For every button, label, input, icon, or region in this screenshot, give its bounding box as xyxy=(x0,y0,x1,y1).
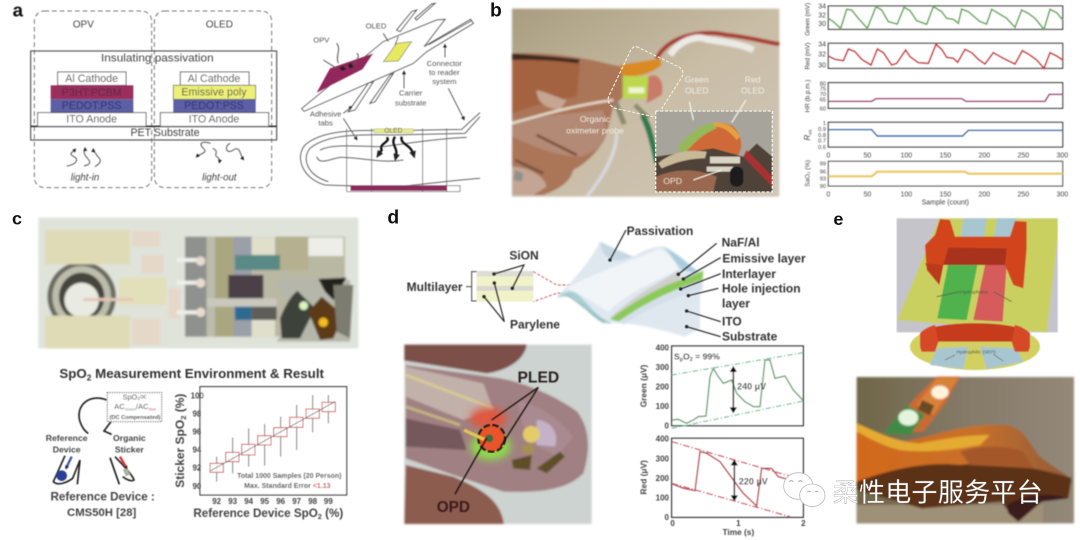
schematic: reference device vs organic sticker: Green xyxy=(125,406,136,411)
print head render xyxy=(897,218,1058,332)
icon: emission arrows xyxy=(379,137,413,157)
layer labels: Substrate xyxy=(722,330,778,344)
chart: ratio of ratios: 1 xyxy=(823,121,826,127)
print head render: Hydrophobic xyxy=(960,290,989,296)
chart: ratio of ratios: 250 xyxy=(1018,153,1029,160)
chart: green optical signal: 100 xyxy=(656,402,670,411)
chart: oxygen saturation: SaO₂ (%) xyxy=(804,160,811,187)
chart: red optical signal: Red (μV) xyxy=(638,460,648,494)
chart: sticker vs reference SpO2 xyxy=(173,387,347,521)
chart: oxygen saturation: 50 xyxy=(863,192,871,199)
chart: sticker vs reference SpO2: 2 xyxy=(318,512,322,521)
chart: ratio of ratios: 100 xyxy=(901,153,912,160)
trend line xyxy=(211,402,335,471)
panel c: sticker device and SpO2 result xyxy=(12,208,358,521)
chart: heart rate: HR (b.p.m.) xyxy=(804,80,811,112)
chart: ratio of ratios: 0 xyxy=(826,153,830,160)
chart: red signal: 34 xyxy=(818,42,826,49)
inset photo of probe on finger xyxy=(656,111,772,192)
chart: oxygen saturation: 200 xyxy=(979,192,990,199)
chart: sticker vs reference SpO2: 90 xyxy=(192,482,202,491)
layer labels: Parylene xyxy=(510,317,560,331)
chart: red optical signal: 100 xyxy=(656,493,670,502)
chart: green signal: 34 xyxy=(818,4,826,11)
photo of organic sticker xyxy=(38,218,358,348)
chart: oxygen saturation: 250 xyxy=(1018,192,1029,199)
section heading: SpO xyxy=(59,366,87,381)
axis tick labels: 93 xyxy=(228,497,238,506)
diagram labels: substrate xyxy=(395,98,426,107)
OLED heading: OLED xyxy=(206,20,233,31)
axis tick labels: 97 xyxy=(292,497,302,506)
chart: red optical signal: 1 xyxy=(736,519,741,528)
chart: green optical signal: 300 xyxy=(656,363,670,372)
chart: oxygen saturation: 0 xyxy=(826,192,830,199)
photo annotation labels: OPD xyxy=(663,176,682,186)
photo callout labels xyxy=(437,369,559,516)
diagram labels: to reader xyxy=(429,68,460,77)
photo annotation labels: Organic xyxy=(580,114,611,124)
film illustration xyxy=(557,242,703,337)
photo annotation labels: oximeter probe xyxy=(566,125,624,135)
layer labels: Emissive layer xyxy=(722,251,806,265)
chart: ratio of ratios: 0.9 xyxy=(818,127,826,133)
chart: red optical signal: 300 xyxy=(656,455,670,464)
OLED layer stack: PEDOT:PSS xyxy=(184,100,244,112)
layer labels xyxy=(407,224,806,344)
chart: green optical signal: p xyxy=(680,357,684,363)
schematic: reference device vs organic sticker: Red xyxy=(149,406,156,411)
light-out label: light-out xyxy=(202,172,238,183)
chart: sticker vs reference SpO2: 100 xyxy=(191,391,205,400)
photo annotation labels: Red xyxy=(745,74,761,84)
panel label c: c xyxy=(12,208,22,228)
panel e: patterned printing and wrist demonstration xyxy=(833,209,1074,523)
diagram labels xyxy=(310,21,462,127)
layer labels: NaF/Al xyxy=(722,236,760,250)
panel b: oximeter photograph xyxy=(490,1,779,197)
chart: green optical signal: Green (μV) xyxy=(638,364,648,407)
axis titles: 2 xyxy=(179,416,188,420)
chart: green signal: 32 xyxy=(818,13,826,20)
diagram labels: Carrier xyxy=(399,89,423,98)
panel b: time-series charts xyxy=(803,3,1068,206)
chart: green signal xyxy=(804,3,1063,36)
red block xyxy=(925,219,1027,288)
layer labels: SiON xyxy=(509,248,539,262)
OPV dashed region xyxy=(34,11,152,188)
chart: ratio of ratios: 0.6 xyxy=(818,145,826,151)
photo callout labels: OPD xyxy=(437,499,470,516)
chart: sticker vs reference SpO2: (%) xyxy=(322,507,343,520)
chart: green signal: Green (mV) xyxy=(804,3,811,36)
chart: oxygen saturation: 99 xyxy=(820,162,826,168)
photo annotation labels: Green xyxy=(685,75,709,85)
OLED layer stack: ITO Anode xyxy=(189,114,239,126)
whiskers xyxy=(217,395,328,482)
substrate label: PET Substrate xyxy=(130,127,200,139)
OPV layer stack xyxy=(38,72,146,126)
chart: oxygen saturation xyxy=(804,160,1068,206)
chart: ratio of ratios: 150 xyxy=(940,153,951,160)
diagram labels: tabs xyxy=(318,118,333,127)
sample annotation: Total 1000 Samples (20 Person) xyxy=(237,473,341,480)
chart: oxygen saturation: Sample (count) xyxy=(922,199,969,206)
layer labels: Hole injection xyxy=(722,282,801,296)
inset dashed border xyxy=(656,111,772,192)
icon: light-in arrows xyxy=(67,148,100,167)
schematic: reference device vs organic sticker xyxy=(46,393,162,519)
chart: sticker vs reference SpO2: Reference Device SpO xyxy=(193,507,318,520)
OPV label on finger: OPV xyxy=(392,185,406,192)
OLED dashed region xyxy=(154,11,272,188)
schematic: reference device vs organic sticker: Sticker xyxy=(115,444,144,454)
magnified cross-section oval xyxy=(910,323,1040,370)
chart: oxygen saturation: 150 xyxy=(940,192,951,199)
diagram labels: system xyxy=(432,77,456,86)
chart: heart rate: 80 xyxy=(820,82,826,88)
chart: oxygen saturation: 90 xyxy=(820,184,826,190)
chart: green optical signal: 240 μV xyxy=(737,381,766,391)
chart: ratio of ratios: 50 xyxy=(863,153,871,160)
layer labels: ITO xyxy=(722,314,742,328)
OLED layer stack: Al Cathode xyxy=(188,73,240,85)
chart: green optical signal: 0 xyxy=(665,421,670,430)
chart: red optical signal: 0 xyxy=(670,519,675,528)
chart: green optical signal: 2 xyxy=(690,357,693,363)
schematic: reference device vs organic sticker: Organic xyxy=(113,433,146,443)
light-in label: light-in xyxy=(71,172,99,183)
OPV layer stack: P3HT:PCBM xyxy=(62,87,122,99)
layer labels: layer xyxy=(722,297,750,311)
photo of hand and probe xyxy=(512,9,779,197)
axis tick labels xyxy=(212,497,333,506)
panel label b: b xyxy=(490,1,502,22)
chart: red optical signal xyxy=(638,434,806,537)
exploded probe diagram xyxy=(302,3,473,112)
axis titles: Sticker SpO xyxy=(173,420,187,488)
axis tick labels: 92 xyxy=(212,497,222,506)
schematic: reference device vs organic sticker: SpO₂∝ xyxy=(123,393,147,402)
photo annotation labels: OLED xyxy=(741,85,764,95)
chart: red signal: 30 xyxy=(818,62,826,69)
panel label e: e xyxy=(833,209,843,229)
panel d: fingertip photo and optical signals xyxy=(404,344,825,537)
chart: ratio of ratios: os xyxy=(807,129,813,135)
shared passivation and substrate frame xyxy=(31,51,277,140)
OLED label on finger: OLED xyxy=(384,128,403,135)
chart: oxygen saturation: 300 xyxy=(1057,192,1068,199)
chart: green optical signal: 200 xyxy=(656,382,670,391)
dashed highlight around probe xyxy=(608,46,683,117)
section heading: 2 xyxy=(87,372,92,382)
magnified cross-section oval: Hydrophilic (SEP) xyxy=(956,349,996,355)
icon: light-out arrows xyxy=(197,142,243,162)
photo callout labels: PLED xyxy=(517,369,559,386)
photo annotation labels xyxy=(566,74,764,186)
chart: ratio of ratios: 0.7 xyxy=(818,139,826,145)
OPV heading: OPV xyxy=(73,20,94,31)
OPV layer stack: ITO Anode xyxy=(66,114,117,126)
diagram labels: OLED xyxy=(366,21,387,30)
chart: red optical signal: 2 xyxy=(801,519,806,528)
schematic: reference device vs organic sticker: Reference xyxy=(46,433,88,443)
diagram labels: OPV xyxy=(313,36,330,45)
diagram labels: Adhesive xyxy=(310,109,341,118)
chart: oxygen saturation: 100 xyxy=(901,192,912,199)
chart: heart rate: 70 xyxy=(820,92,826,98)
section heading: Measurement Environment & Result xyxy=(91,366,325,381)
OPV layer stack: PEDOT:PSS xyxy=(62,100,122,112)
chart: green optical signal: S xyxy=(674,351,680,361)
schematic: reference device vs organic sticker: (DC Compensated) xyxy=(110,415,161,421)
panel label d: d xyxy=(387,208,399,229)
chart: red optical signal: 400 xyxy=(656,434,670,443)
chart: ratio of ratios: 300 xyxy=(1057,153,1068,160)
chart: green optical signal: 400 xyxy=(656,344,670,353)
chart: ratio of ratios: 0.8 xyxy=(818,133,826,139)
chart: sticker vs reference SpO2: 98 xyxy=(192,409,202,418)
chart: green optical signal: O xyxy=(683,351,690,361)
panel a: OPV and OLED device stacks xyxy=(13,0,480,192)
axis tick labels: 98 xyxy=(308,497,318,506)
chart: ratio of ratios xyxy=(803,121,1068,160)
box plots xyxy=(210,402,335,472)
photo annotation labels: OLED xyxy=(685,86,708,96)
chart: red signal: Red (mV) xyxy=(804,42,811,70)
axis tick labels: 95 xyxy=(260,497,270,506)
chart: red optical signal: 220 μV xyxy=(739,477,768,487)
chart: heart rate xyxy=(804,80,1063,112)
axis tick labels: 94 xyxy=(244,497,254,506)
chart: ratio of ratios: R xyxy=(803,135,812,141)
layer labels: Multilayer xyxy=(407,280,463,294)
chart: heart rate: 75 xyxy=(820,87,826,93)
axis tick labels: 99 xyxy=(324,497,333,506)
OLED layer stack xyxy=(160,72,269,126)
chart: red signal xyxy=(804,42,1063,70)
red and green glow xyxy=(470,408,511,460)
diagram labels: Connector xyxy=(427,59,462,68)
watermark text: 柔性电子服务平台 xyxy=(833,478,1043,508)
fingertip photograph xyxy=(404,345,592,524)
schematic: reference device vs organic sticker: Reference Device : xyxy=(51,490,155,503)
layer labels: Passivation xyxy=(627,224,693,238)
chart: heart rate: 60 xyxy=(820,106,826,112)
chart: oxygen saturation: 96 xyxy=(820,169,826,175)
axis titles: (%) xyxy=(173,394,187,416)
chart: sticker vs reference SpO2: Max. Standard Error <1.13 xyxy=(244,483,331,490)
chart: green signal: 30 xyxy=(818,21,826,28)
chart: red optical signal: 200 xyxy=(656,474,670,483)
axis tick labels: 96 xyxy=(276,497,286,506)
chart: red signal: 32 xyxy=(818,52,826,59)
panel label a: a xyxy=(13,0,24,21)
chart: sticker vs reference SpO2: 92 xyxy=(192,464,202,473)
leader lines xyxy=(482,230,721,337)
chart: red optical signal: 0 xyxy=(665,513,670,522)
chart: sticker vs reference SpO2: 96 xyxy=(192,428,202,437)
icon: watermark chat bubbles xyxy=(784,473,825,507)
PLED and OPD active area xyxy=(464,425,505,452)
multilayer inset xyxy=(466,271,575,302)
schematic: reference device vs organic sticker: Device xyxy=(53,444,81,454)
OPV layer stack: Al Cathode xyxy=(65,73,118,85)
schematic: reference device vs organic sticker: AC xyxy=(114,402,125,411)
chart: ratio of ratios: 200 xyxy=(979,153,990,160)
schematic: reference device vs organic sticker: CMS50H [28] xyxy=(67,507,137,519)
OLED layer stack: Emissive poly xyxy=(181,87,247,99)
chart: oxygen saturation: 93 xyxy=(820,177,826,183)
diagram leader arrows xyxy=(343,45,464,139)
chart: red optical signal: Time (s) xyxy=(722,527,754,537)
layer labels: Interlayer xyxy=(722,267,776,281)
chart: green optical signal xyxy=(638,344,803,430)
photo of wearable on wrist xyxy=(857,377,1074,523)
passivation label: Insulating passivation xyxy=(101,52,214,64)
panel d: device layer diagram xyxy=(387,208,806,344)
chart: sticker vs reference SpO2: 94 xyxy=(192,446,202,455)
schematic: reference device vs organic sticker: /AC xyxy=(136,402,149,411)
finger sketch with sensor xyxy=(300,113,480,192)
chart: green optical signal: = 99% xyxy=(693,351,720,361)
chart: heart rate: 65 xyxy=(820,97,826,103)
